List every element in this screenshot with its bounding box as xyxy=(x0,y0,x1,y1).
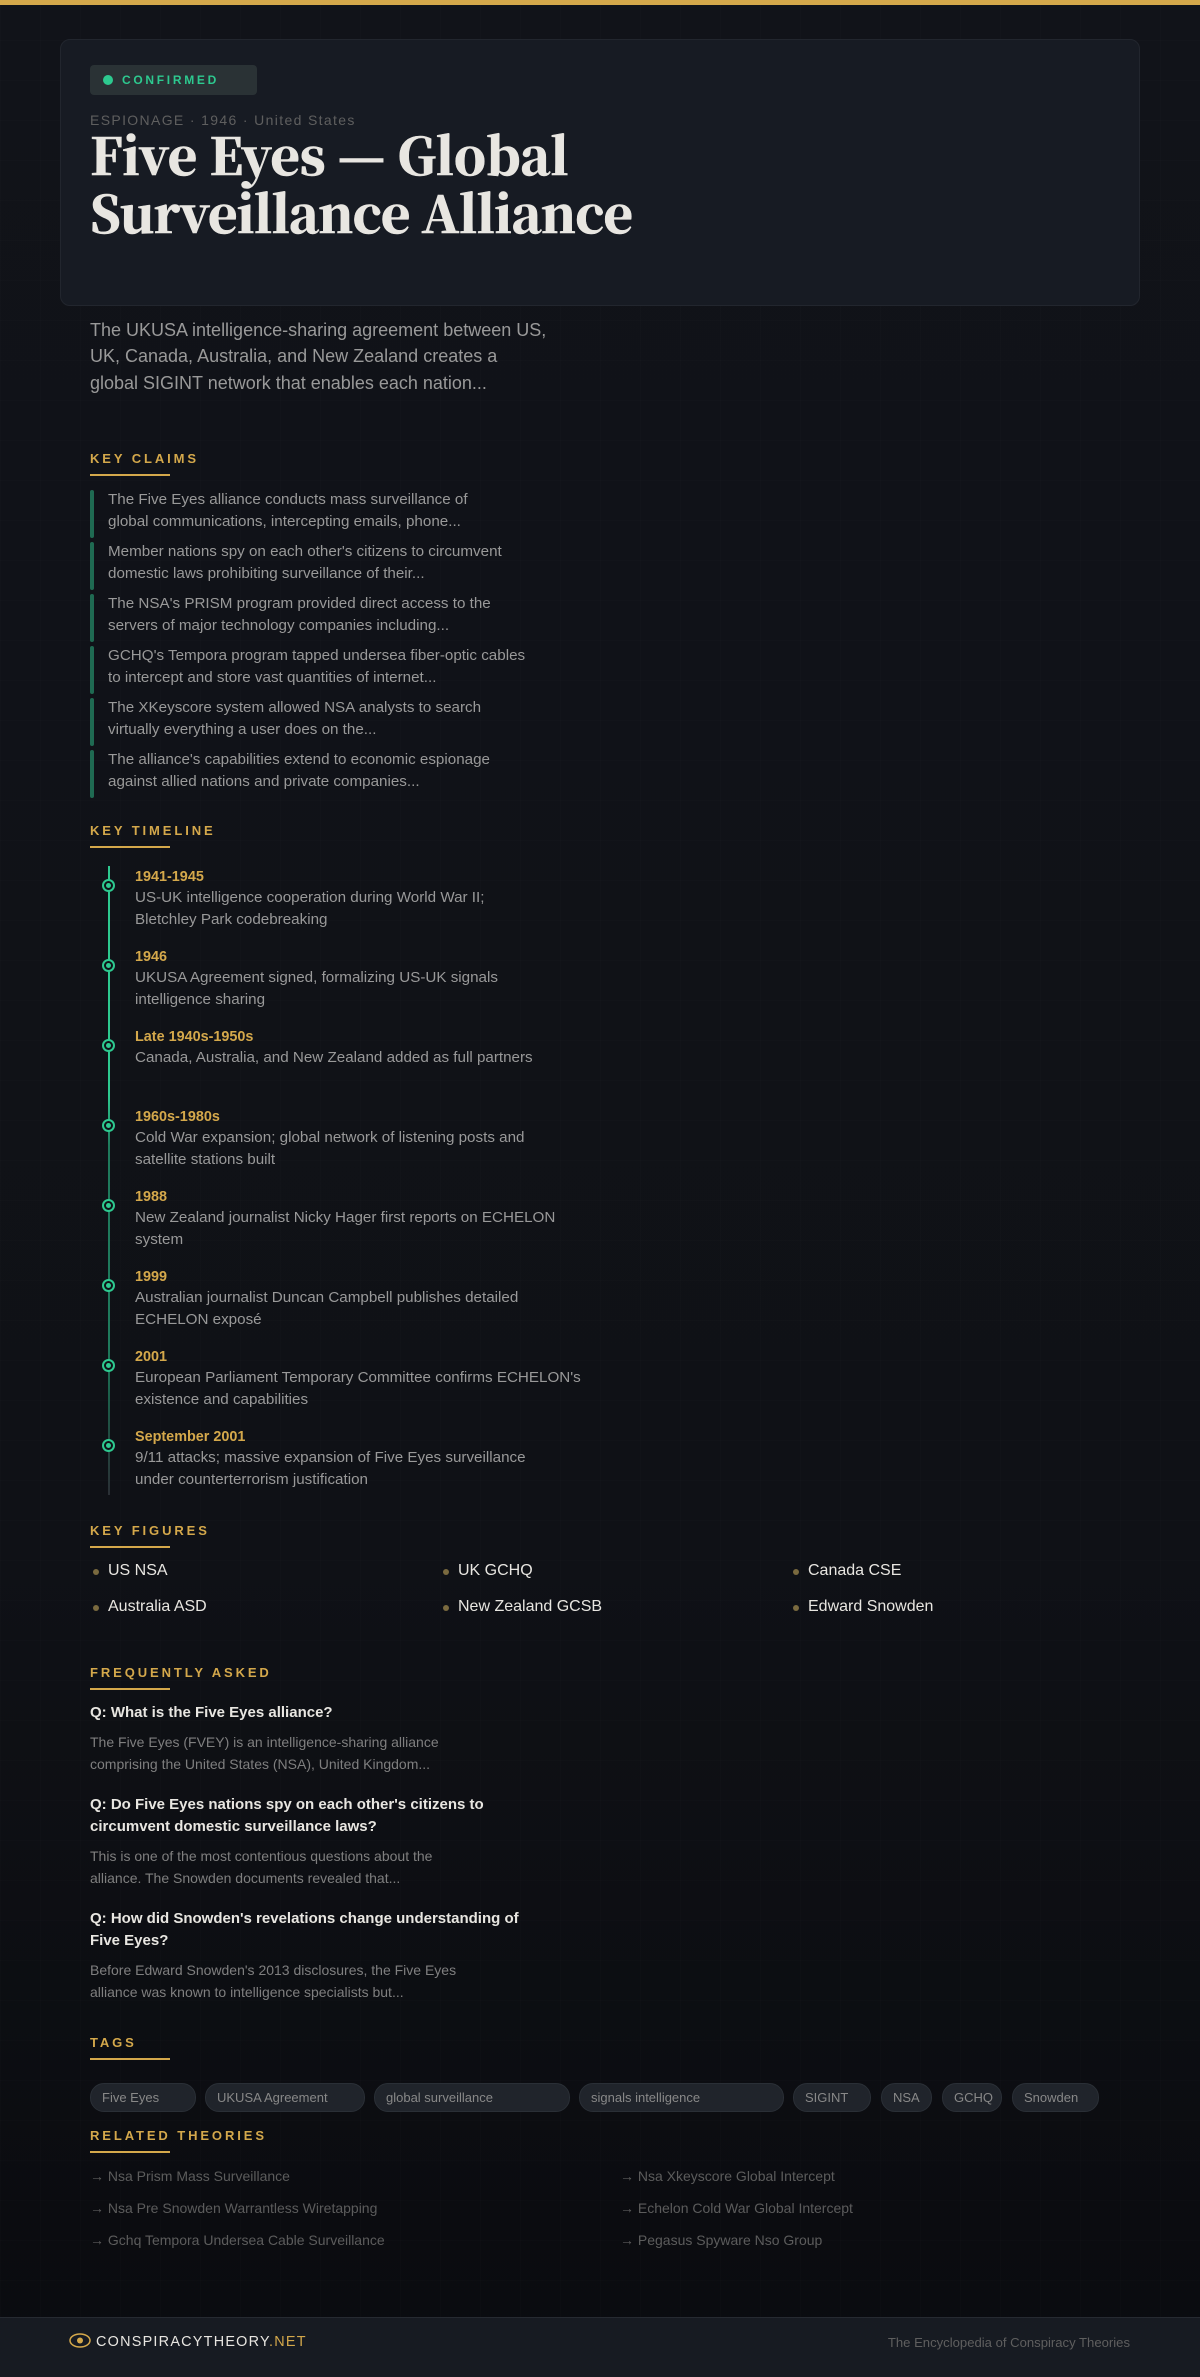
summary text xyxy=(90,320,546,393)
FAQ 1: comprising the United States (NSA), United Kingdom... xyxy=(90,1756,430,1772)
event 1999: 1999 xyxy=(135,1269,167,1285)
tag xyxy=(793,2083,871,2112)
summary text: global SIGINT network that enables each nation... xyxy=(90,373,487,393)
tag xyxy=(374,2083,570,2112)
event 1941-1945: Bletchley Park codebreaking xyxy=(135,911,327,928)
claim 5 xyxy=(90,698,481,746)
figure: UK GCHQ: UK GCHQ xyxy=(458,1562,533,1579)
tag: GCHQ xyxy=(954,2090,993,2105)
event late 1940s-1950s: Late 1940s-1950s xyxy=(135,1029,253,1045)
event 1946: intelligence sharing xyxy=(135,991,265,1008)
summary text: The UKUSA intelligence-sharing agreement between US, xyxy=(90,320,546,340)
panel: header card xyxy=(60,39,1140,306)
figure: Australia ASD: Australia ASD xyxy=(108,1598,207,1615)
tag: Five Eyes xyxy=(102,2090,159,2105)
event 1988: New Zealand journalist Nicky Hager first reports on ECHELON xyxy=(135,1209,555,1226)
link: → Gchq Tempora Undersea Cable Surveillance xyxy=(90,2232,385,2248)
tag: signals intelligence xyxy=(591,2090,700,2105)
link: → Nsa Prism Mass Surveillance xyxy=(90,2168,290,2184)
claim 1: global communications, intercepting emails, phone... xyxy=(108,513,461,530)
figure: US NSA: US NSA xyxy=(108,1562,168,1579)
event 1941-1945: US-UK intelligence cooperation during World War II; xyxy=(135,889,484,906)
event 1999: ECHELON exposé xyxy=(135,1311,262,1328)
claim 4: GCHQ's Tempora program tapped undersea fiber-optic cables xyxy=(108,647,525,664)
link: → Nsa Xkeyscore Global Intercept xyxy=(620,2168,835,2184)
claim 6: against allied nations and private companies... xyxy=(108,773,420,790)
event 1946 xyxy=(102,949,498,1008)
tag xyxy=(579,2083,784,2112)
link: → Pegasus Spyware Nso Group xyxy=(620,2232,822,2248)
event 2001: existence and capabilities xyxy=(135,1391,308,1408)
FAQ 3: Five Eyes? xyxy=(90,1932,168,1949)
FAQ 3: alliance was known to intelligence specialists but... xyxy=(90,1984,404,2000)
event 1941-1945 xyxy=(102,869,484,928)
event 1960s-1980s: Cold War expansion; global network of listening posts and xyxy=(135,1129,524,1146)
title xyxy=(90,118,632,248)
panel: FAQ xyxy=(90,1704,519,2000)
icon: eye logo xyxy=(69,2333,91,2348)
figure: Edward Snowden: Edward Snowden xyxy=(808,1598,933,1615)
panel: tag pills xyxy=(90,2083,1099,2112)
FAQ 2 xyxy=(90,1796,484,1886)
heading: related theories: RELATED THEORIES xyxy=(90,2128,267,2143)
panel: timeline xyxy=(102,866,581,1495)
heading: key figures: KEY FIGURES xyxy=(90,1523,210,1538)
claim 2 xyxy=(90,542,502,590)
figure: New Zealand GCSB: New Zealand GCSB xyxy=(458,1598,602,1615)
FAQ 3: Q: How did Snowden's revelations change understanding of xyxy=(90,1910,519,1927)
summary text: UK, Canada, Australia, and New Zealand creates a xyxy=(90,346,497,366)
event 2001: 2001 xyxy=(135,1349,167,1365)
event september 2001: 9/11 attacks; massive expansion of Five Eyes surveillance xyxy=(135,1449,526,1466)
claim 3: The NSA's PRISM program provided direct access to the xyxy=(108,595,491,612)
claim 3: servers of major technology companies including... xyxy=(108,617,449,634)
claim 2: domestic laws prohibiting surveillance of their... xyxy=(108,565,425,582)
event 1988: 1988 xyxy=(135,1189,167,1205)
tag: Snowden xyxy=(1024,2090,1078,2105)
event 1999 xyxy=(102,1269,518,1328)
claim 1 xyxy=(90,490,468,538)
FAQ 2: Q: Do Five Eyes nations spy on each other's citizens to xyxy=(90,1796,484,1813)
claim 6 xyxy=(90,750,490,798)
FAQ 2: alliance. The Snowden documents revealed that... xyxy=(90,1870,400,1886)
event 1941-1945: 1941-1945 xyxy=(135,869,204,885)
tag xyxy=(1012,2083,1099,2112)
event 1960s-1980s xyxy=(102,1109,524,1168)
status badge: confirmed xyxy=(90,65,257,95)
timeline spine xyxy=(108,866,110,1495)
event late 1940s-1950s xyxy=(102,1029,533,1066)
heading: frequently asked: FREQUENTLY ASKED xyxy=(90,1665,272,1680)
FAQ 1: The Five Eyes (FVEY) is an intelligence-sharing alliance xyxy=(90,1734,439,1750)
FAQ 1: Q: What is the Five Eyes alliance? xyxy=(90,1704,333,1721)
event 1988 xyxy=(102,1189,555,1248)
heading: key claims: KEY CLAIMS xyxy=(90,451,199,466)
claim 6: The alliance's capabilities extend to economic espionage xyxy=(108,751,490,768)
event 1960s-1980s: satellite stations built xyxy=(135,1151,275,1168)
FAQ 2: This is one of the most contentious questions about the xyxy=(90,1848,432,1864)
figure: Canada CSE: Canada CSE xyxy=(808,1562,901,1579)
title: Five Eyes — Global xyxy=(90,118,568,190)
event 1999: Australian journalist Duncan Campbell publishes detailed xyxy=(135,1289,518,1306)
category meta line: ESPIONAGE · 1946 · United States xyxy=(90,112,356,128)
event 1960s-1980s: 1960s-1980s xyxy=(135,1109,220,1125)
tag xyxy=(942,2083,1002,2112)
FAQ 3 xyxy=(90,1910,519,2000)
claim 4 xyxy=(90,646,525,694)
panel: related theories links xyxy=(90,2168,853,2248)
event 1988: system xyxy=(135,1231,183,1248)
tag: NSA xyxy=(893,2090,920,2105)
panel: key figures grid xyxy=(93,1562,933,1615)
tag: SIGINT xyxy=(805,2090,848,2105)
title: Surveillance Alliance xyxy=(90,176,632,248)
top accent bar xyxy=(0,0,1200,5)
event september 2001 xyxy=(102,1429,526,1488)
claim 4: to intercept and store vast quantities of internet... xyxy=(108,669,436,686)
event late 1940s-1950s: Canada, Australia, and New Zealand added as full partners xyxy=(135,1049,533,1066)
event 1946: 1946 xyxy=(135,949,167,965)
event 2001: European Parliament Temporary Committee confirms ECHELON's xyxy=(135,1369,581,1386)
claim 5: virtually everything a user does on the... xyxy=(108,721,376,738)
footer tagline: The Encyclopedia of Conspiracy Theories xyxy=(888,2335,1130,2350)
tag: global surveillance xyxy=(386,2090,493,2105)
FAQ 3: Before Edward Snowden's 2013 disclosures, the Five Eyes xyxy=(90,1962,456,1978)
site name: CONSPIRACYTHEORY.NET xyxy=(96,2334,307,2350)
link: → Nsa Pre Snowden Warrantless Wiretapping xyxy=(90,2200,377,2216)
FAQ 2: circumvent domestic surveillance laws? xyxy=(90,1818,377,1835)
claim 1: The Five Eyes alliance conducts mass surveillance of xyxy=(108,491,468,508)
badge label: CONFIRMED xyxy=(122,73,219,87)
heading: tags: TAGS xyxy=(90,2035,137,2050)
icon: status dot xyxy=(103,75,113,85)
footer xyxy=(0,2317,1200,2377)
event september 2001: under counterterrorism justification xyxy=(135,1471,368,1488)
panel: key claims list xyxy=(90,490,525,798)
claim 2: Member nations spy on each other's citizens to circumvent xyxy=(108,543,502,560)
tag xyxy=(881,2083,932,2112)
event 1946: UKUSA Agreement signed, formalizing US-UK signals xyxy=(135,969,498,986)
heading: key timeline: KEY TIMELINE xyxy=(90,823,216,838)
event september 2001: September 2001 xyxy=(135,1429,245,1445)
FAQ 1 xyxy=(90,1704,439,1772)
claim 3 xyxy=(90,594,491,642)
tag xyxy=(205,2083,365,2112)
link: → Echelon Cold War Global Intercept xyxy=(620,2200,853,2216)
tag xyxy=(90,2083,196,2112)
tag: UKUSA Agreement xyxy=(217,2090,328,2105)
claim 5: The XKeyscore system allowed NSA analysts to search xyxy=(108,699,481,716)
event 2001 xyxy=(102,1349,581,1408)
